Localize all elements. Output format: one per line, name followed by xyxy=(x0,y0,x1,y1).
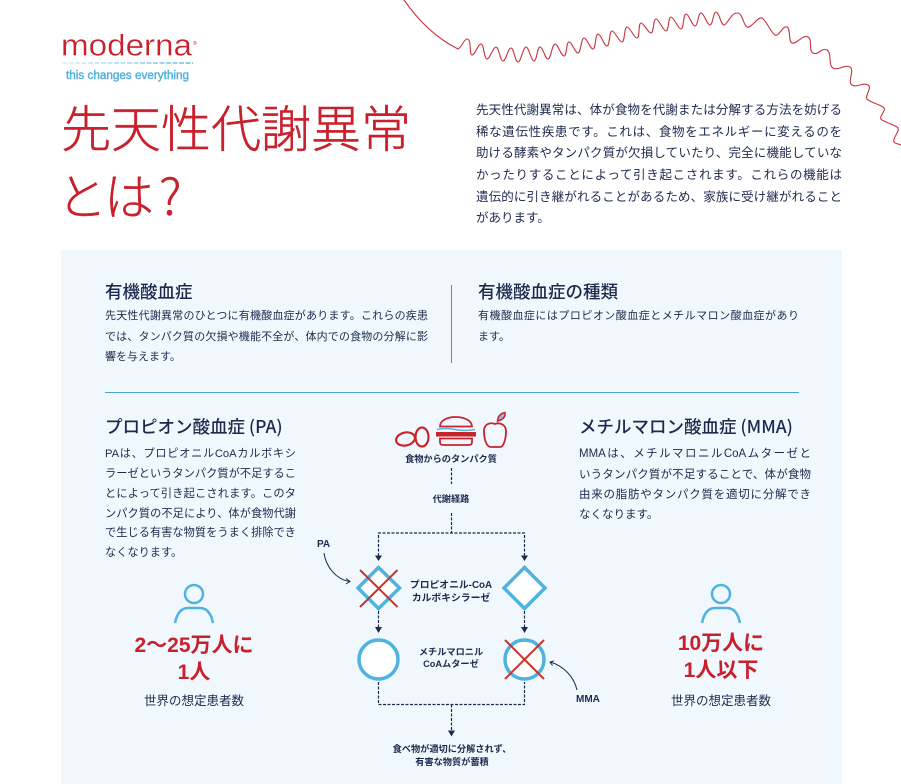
diagram label: propionyl-CoA carboxylase: プロピオニル-CoA xyxy=(410,580,492,591)
text: organic acidemia: 先天性代謝異常のひとつに有機酸血症があります。これらの疾患 xyxy=(105,310,428,322)
diagram label: PA: PA xyxy=(317,539,330,550)
text: MMA: なくなります。 xyxy=(579,509,658,521)
intro text: があります。 xyxy=(476,211,550,225)
intro text: 遺伝的に引き継がれることがあるため、家族に受け継がれること xyxy=(476,190,842,204)
enzyme: PA diamond with cross xyxy=(358,568,400,608)
diagram label: propionyl-CoA carboxylase: カルボキシラーゼ xyxy=(412,592,490,604)
text: MMA: いうタンパク質が不足することで、体が食物 xyxy=(579,469,811,481)
stat: PA prevalence xyxy=(134,584,254,708)
title xyxy=(57,90,411,230)
diagram label: outcome: 有害な物質が蓄積 xyxy=(415,756,489,766)
enzyme: MMA diamond xyxy=(504,568,545,608)
diagram label: methylmalonyl-CoA mutase: CoAムターゼ xyxy=(423,659,479,669)
dashed pathway lines xyxy=(378,468,524,730)
text: PA: で生じる有害な物質をうまく排除でき xyxy=(105,527,296,539)
diagram label: outcome xyxy=(392,744,511,766)
text: types: ます。 xyxy=(478,331,510,343)
enzyme: MMA circle with cross xyxy=(505,640,544,679)
intro text: かったりすることによって引き起こされます。これらの機能は xyxy=(476,168,842,182)
diagram label: methylmalonyl-CoA mutase: メチルマロニル xyxy=(419,646,483,656)
text: PA: なくなります。 xyxy=(105,547,182,559)
caption: 世界の想定患者数 xyxy=(144,694,244,708)
title: とは? xyxy=(57,158,182,230)
heading: PA: プロピオン酸血症 (PA) xyxy=(105,414,283,439)
diagram label: methylmalonyl-CoA mutase xyxy=(419,646,483,669)
text: organic acidemia: では、タンパク質の欠損や機能不全が、体内での食物の分解に影 xyxy=(105,331,428,343)
diagram label: protein from food: 食物からのタンパク質 xyxy=(405,454,497,464)
text: MMA: MMAは、メチルマロニルCoAムターゼと xyxy=(579,448,811,460)
number: 1 or fewer in 100,000: 10万人に xyxy=(678,632,764,655)
icon: person xyxy=(174,584,214,624)
text: PA: ンパク質の不足により、体が食物代謝 xyxy=(105,508,296,520)
text: PA: とによって引き起こされます。このタ xyxy=(105,488,296,500)
text: organic acidemia: 響を与えます。 xyxy=(105,351,181,363)
panel: types of organic acidemia xyxy=(478,279,799,343)
registered mark: ® xyxy=(193,40,197,47)
text: types: 有機酸血症にはプロピオン酸血症とメチルマロン酸血症があり xyxy=(478,310,799,322)
heading: MMA: メチルマロン酸血症 (MMA) xyxy=(579,414,793,439)
text: organic acidemia xyxy=(105,310,428,363)
heading: types: 有機酸血症の種類 xyxy=(478,279,618,304)
intro text: 先天性代謝異常は、体が食物を代謝または分解する方法を妨げる xyxy=(476,103,842,117)
stat: PA prevalence: 1人 xyxy=(178,661,210,684)
text: PA xyxy=(105,448,296,559)
panel: propionic acidemia xyxy=(105,414,296,559)
panel: light blue background xyxy=(61,250,842,784)
diagram label: MMA: MMA xyxy=(576,694,600,705)
logo tagline: this changes everything xyxy=(66,70,189,82)
caption: 世界の想定患者数 xyxy=(671,694,771,708)
intro text: 助ける酵素やタンパク質が欠損していたり、完全に機能していな xyxy=(476,146,842,160)
text: MMA: 由来の脂肪やタンパク質を適切に分解でき xyxy=(579,489,811,501)
pathway diagram xyxy=(324,412,578,736)
title: 先天性代謝異常 xyxy=(61,90,411,162)
text: MMA xyxy=(579,447,811,521)
intro text: 稀な遺伝性疾患です。これは、食物をエネルギーに変えるのを xyxy=(476,125,842,139)
logo: moderna xyxy=(61,34,197,82)
panel: methylmalonic acidemia xyxy=(579,414,811,521)
arrow: PA pointer xyxy=(324,553,350,584)
icon: food (eggs, burger, apple) xyxy=(395,412,506,447)
arrow: MMA pointer xyxy=(550,661,577,690)
stat: MMA prevalence: 1人以下 xyxy=(684,659,758,682)
stat: MMA prevalence xyxy=(671,584,771,708)
text: PA: PAは、プロピオニルCoAカルボキシ xyxy=(105,448,296,460)
text: PA: ラーゼというタンパク質が不足するこ xyxy=(105,468,296,480)
text: types xyxy=(478,310,799,343)
heading: organic acidemia: 有機酸血症 xyxy=(105,279,192,304)
diagram label: outcome: 食べ物が適切に分解されず、 xyxy=(393,744,511,754)
arrowheads xyxy=(375,556,528,736)
panel: organic acidemia xyxy=(105,279,428,363)
number: 1 in 20,000–250,000: 2〜25万人に xyxy=(134,634,254,657)
diagram label: propionyl-CoA carboxylase xyxy=(410,580,492,604)
enzyme: PA circle xyxy=(359,640,398,679)
icon: person xyxy=(700,584,742,624)
intro text xyxy=(476,103,842,225)
diagram label: metabolic pathway: 代謝経路 xyxy=(433,494,469,504)
